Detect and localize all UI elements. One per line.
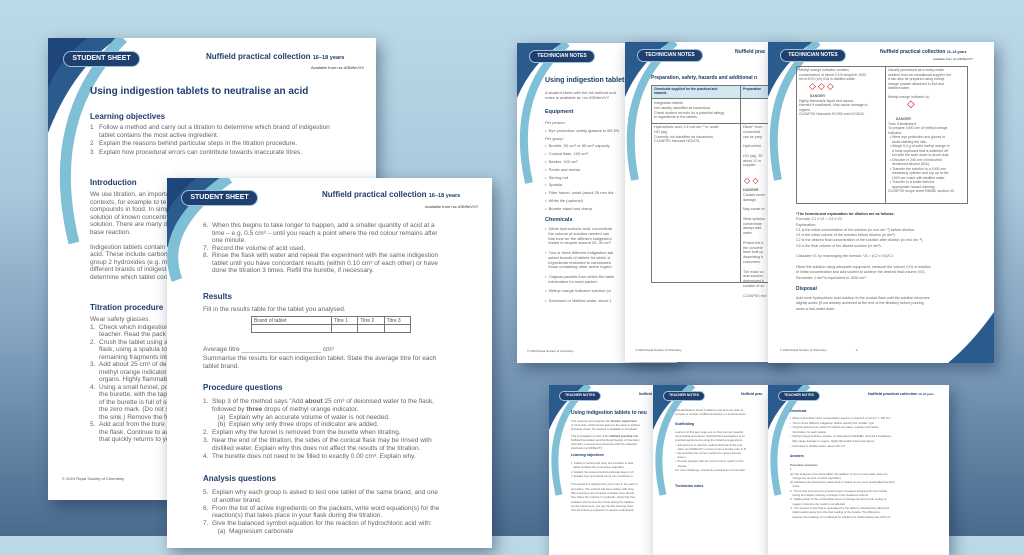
page: student sheet 1: 1 Follow a method and carry out a titration to determine which brand of indigestion <box>90 124 330 131</box>
page: technician notes 1: Per person: <box>545 120 566 125</box>
pill: TECHNICIAN NOTES <box>788 52 838 58</box>
chemicals: Chemicals <box>790 409 806 413</box>
pill <box>778 391 820 401</box>
page: student sheet 2: of another brand. <box>212 497 262 504</box>
hazard table: solution from an educational supplier but <box>888 72 951 76</box>
pill <box>181 190 258 206</box>
page: student sheet 1: the zero mark. (Do not s <box>99 406 169 413</box>
page: student sheet 2: 7. Give the balanced symbol equation for the reaction of hydrochloric acid with: <box>203 520 432 527</box>
page: student sheet 2: (a) Explain why an accurate volume of water is not needed. <box>217 414 390 421</box>
page: technician notes 3: © 2024 Royal Society of Chemistry 3 <box>780 348 857 352</box>
heading: technician notes: Technician notes <box>675 484 703 488</box>
hazard table: it can also be prepared using methyl <box>888 77 944 81</box>
page: teacher notes 2: Learners in this age range are on their journey towards <box>675 430 743 434</box>
page: technician notes 3: down a foul-water drain. <box>796 307 835 311</box>
pill: student sheet: STUDENT SHEET <box>72 55 131 62</box>
page: student sheet 1: solution of known concentr <box>90 214 167 220</box>
page: teacher notes 2: lesson. <box>677 455 686 459</box>
page: technician notes 1 <box>517 43 677 363</box>
table: Chemicals supplied for the practical and <box>654 87 717 91</box>
page: student sheet 1: group 2 hydroxides (e.g. m <box>90 258 167 266</box>
table: to ingredients in the tablets. <box>654 115 698 119</box>
table: May cause re <box>743 207 765 211</box>
page: teacher notes 1: 1 Follow a method and carry out a titration to dete <box>571 461 633 465</box>
hazard table: but with the sash down to avoid dust. <box>892 153 949 157</box>
formula text: Dilute the solution using adequate equipment, measure the volume (V1) of solution <box>796 265 931 269</box>
hazard table: DANGER <box>810 94 825 98</box>
page: student sheet 2: 2. Explain why the funnel is removed from the burette when titrating. <box>203 429 401 436</box>
chemicals: Chemicals <box>545 217 573 223</box>
formula text: of initial concentration and add solvent to achieve the desired final volume (V2). <box>796 270 926 274</box>
page: teacher notes 3: result. <box>792 484 800 488</box>
hazard table: measuring cylinder and top up to the <box>892 171 949 175</box>
hazard table <box>796 66 968 204</box>
hazard table: CLEAPSS recipe sheet RB085, section 40. <box>888 189 955 193</box>
page: teacher notes 3: information for each packet <box>792 430 826 434</box>
hazard table: indicator: <box>888 130 902 134</box>
page: technician notes 2: CLEAPSS reci <box>743 294 766 298</box>
page: student sheet 1: of the burette is full of so <box>99 398 170 406</box>
hazard table: denatured alcohol (IDA). <box>892 162 930 166</box>
page: technician notes 1: • Methyl orange indicator solution (or <box>545 288 611 293</box>
page: technician notes 1: those containing other active ingred <box>548 264 612 269</box>
header: Nuffield practical collection 16–18 years <box>322 190 460 199</box>
pill: TEACHER NOTES <box>565 393 595 397</box>
page: technician notes 1: notes is available at: rsc.li/3N9eVXY <box>545 95 609 100</box>
page: student sheet 1: 1. Check which indigestion <box>90 324 169 330</box>
table: Check student records for a potential allergy <box>654 111 724 115</box>
method steps: time – e.g. 0.5 cm³ – until you reach a point where the red colour remains after <box>212 230 437 236</box>
pill <box>780 49 846 62</box>
page: student sheet 1: tablet contains the most active ingredient. <box>99 132 219 138</box>
page: student sheet 2: 4. The burette does not need to be filled to exactly 0.00 cm³. Explain why. <box>203 453 416 460</box>
hazard table: Toxic if swallowed. <box>888 122 917 126</box>
table: Preparation <box>743 87 761 91</box>
pill: student sheet <box>63 51 140 67</box>
page: teacher notes 3: 3. Adding water to the conical flask does not change the amount (in moles) of <box>790 497 886 501</box>
page: teacher notes 2: • Ask learners to read the method and look at the prac <box>675 443 743 447</box>
method steps <box>203 222 438 274</box>
page: technician notes 2: © 2024 Royal Society of Chemistry <box>635 348 682 352</box>
table: have built up <box>743 250 763 254</box>
formula text: *The formula and explanation for dilution are as follows: <box>796 212 895 216</box>
page: student sheet 1: 2. Crush the tablet using a <box>90 338 168 346</box>
page: teacher notes 3: during the titration causing a change in the measured volume. <box>792 493 869 497</box>
table: Currently not classified as hazardous. <box>654 135 714 139</box>
hazard table: avoid staining the skin. <box>892 140 927 144</box>
page: teacher notes 2: Nuffield prac <box>741 392 762 396</box>
hazard table: Usually purchased as a ready-made <box>888 68 944 72</box>
pill: TEACHER NOTES <box>784 393 814 397</box>
page: student sheet 2: (b) Explain why only three drops of indicator are added. <box>217 421 379 428</box>
table: HCl (aq), 35 <box>743 154 762 158</box>
hazard table: concentration of about 0.4% weight in 1000 <box>799 72 866 76</box>
hazard table: • Weigh 0.4 g of solid methyl orange in <box>890 144 950 148</box>
page: teacher notes 3: (b) Indicators are themselves weak acids or bases so too much would affect the final <box>790 480 894 484</box>
table: The exact co <box>743 270 764 274</box>
page: technician notes 1: • Deionised or distilled water, about 1 <box>545 298 612 303</box>
page: student sheet 2: tablet brand. <box>203 363 239 370</box>
page: technician notes 1: • Dilute hydrochloric acid, concentrati <box>545 226 612 231</box>
page: student sheet 1: the sink.) Remove the fu <box>99 414 169 420</box>
table: water. <box>743 231 753 235</box>
table: concentrate <box>743 222 762 226</box>
page: student sheet 2: Summarise the results for each indigestion tablet. State the average titre for each <box>203 354 436 362</box>
pill: STUDENT SHEET <box>190 194 249 201</box>
page: student sheet 1: determine which tablet con <box>90 274 167 280</box>
pill: TEACHER NOTES <box>669 393 699 397</box>
page: teacher notes 1: When learners test complete a titration they should <box>571 491 634 495</box>
method steps: tablet until you have concordant results (within 0.10 cm³ of each other) or have <box>212 260 438 266</box>
page: technician notes 1: Per group: <box>545 136 564 141</box>
page: student sheet 1: flask, using a spatula to <box>99 346 167 353</box>
page: teacher notes 2: • Provide samples with the correct colour match for the <box>675 459 743 463</box>
titration procedure: Titration procedure <box>90 303 163 312</box>
formula text <box>796 212 931 280</box>
page: student sheet 1: Wear safety glasses. <box>90 316 150 323</box>
hazard table: Highly flammable liquid and vapour. <box>799 98 854 102</box>
page: student sheet 2: Average titre ______________________ cm³ <box>203 346 334 353</box>
page: teacher notes 1: tablet contains the most active ingredient. <box>573 465 625 469</box>
scaffolding: Scaffolding <box>675 422 694 426</box>
method steps: done the titration 3 times. Refill the burette, if necessary. <box>212 267 374 274</box>
page: technician notes 1: • Pestle and mortar <box>545 167 580 172</box>
heading: Preparation, safety, hazards and additional n <box>651 75 757 81</box>
hazard table: Methyl orange indicator (s) <box>888 95 929 99</box>
page: student sheet 1: 2 Explain the reasons behind particular steps in the titration procedure. <box>90 140 297 147</box>
pill: TECHNICIAN NOTES <box>645 52 695 58</box>
page: teacher notes 1: procedure. The method has been written with simp <box>571 487 634 491</box>
page: teacher notes 1: out the experiment, you say the first learning objec <box>571 504 634 508</box>
formula text: Calculate V1 by rearranging the formula: V1 = (C2 x V2)/C1 <box>796 254 893 258</box>
page: technician notes 1: • Conical flask, 100 cm³ <box>545 151 588 156</box>
page: student sheet 1: organs. Highly flammab <box>99 376 167 383</box>
formula text: C1 is the initial concentration of the solution (in mol dm⁻³) before dilution. <box>796 228 915 232</box>
page: teacher notes 1: practicals rsc.li/3N9eVXY <box>571 446 602 450</box>
introduction: Introduction <box>90 178 137 187</box>
page: teacher notes 1: chemistry concepts and processes with this collection <box>571 442 637 446</box>
page: technician notes 2 <box>625 42 785 362</box>
page: teacher notes 2: out practical procedures. Scaffold this investigation to su <box>675 434 745 438</box>
page: technician notes 2: solution of so <box>743 284 764 288</box>
table: ◇ ◇ <box>744 176 759 185</box>
table: HCl (aq) <box>654 130 667 134</box>
table: damage. <box>743 198 757 202</box>
page: technician notes 1: • Two or three different indigestion tab <box>545 250 613 255</box>
table: Hydrochlori <box>743 144 761 148</box>
formula text: C2 is the desired final concentration of the solution after dilution (in mol dm⁻³). <box>796 238 923 242</box>
results table: Titre 2 <box>360 318 374 324</box>
page: student sheet 1 <box>48 38 376 500</box>
page: student sheet 1: compounds in food. In simp <box>90 206 170 213</box>
table: supplier. <box>743 163 756 167</box>
page: teacher notes 2: video rsc.li/3N9eVXY on how to use a burette prior to th <box>677 447 746 451</box>
page: teacher notes 1: Use the follow-up questions to assess understandi <box>571 508 633 512</box>
formula text: Reminder: 1 dm³ is equivalent to 1000 cm³. <box>796 276 867 280</box>
page: teacher notes 2 <box>653 385 803 555</box>
pill <box>637 49 703 62</box>
table: CLEAPSS Hazcard HC047A <box>654 139 700 143</box>
header: Nuffield practical collection 16–18 years <box>880 49 967 55</box>
page: teacher notes 1: indicator and remove the funnel during the addition <box>571 500 634 504</box>
table <box>651 85 791 283</box>
page: teacher notes 3 <box>768 385 949 555</box>
hazard table: ml of 20% (v/v) IDA in distilled water. <box>799 77 856 81</box>
hazard table: CLEAPSS Hazcards HC050 and HC040A. <box>799 112 865 116</box>
page: teacher notes 1: they follow the method. In particular, check that they <box>571 495 635 499</box>
hazard table: • Dissolve in 200 cm³ of industrial <box>890 158 942 162</box>
page: teacher notes 3: • Dilute hydrochloric acid, concentration equal to or below 0.4 mol dm⁻³, 100 cm³ <box>790 416 891 420</box>
table: Dilute* from <box>743 125 762 129</box>
page: student sheet 2: 5. Explain why each group is asked to test one tablet of the same brand, and one <box>203 489 438 496</box>
page: student sheet 1: remaining fragments int <box>99 354 167 360</box>
table: Hydrochloric acid, 0.4 mol dm⁻³ or under <box>654 125 719 129</box>
hazard table: • Transfer the solution to a 1000 cm³ <box>890 166 946 170</box>
table: Causes sever <box>743 193 765 197</box>
results: Results <box>203 292 232 301</box>
page: teacher notes 1: 3 Explain how procedural errors can contribute to <box>571 474 633 478</box>
page: student sheet 1: Indigestion tablets contain <box>90 244 165 250</box>
page: technician notes 3: Available from rsc.li/3N9eVXY <box>933 57 973 61</box>
page: technician notes 1: © 2024 Royal Society of Chemistry <box>527 349 574 353</box>
pill <box>663 391 705 401</box>
page: technician notes 1: • Stirring rod <box>545 175 568 180</box>
page: student sheet 1: methyl orange indicator <box>99 368 167 376</box>
table: determined b <box>743 279 764 283</box>
page: teacher notes 2: change. <box>677 464 687 468</box>
page: technician notes 2: Nuffield prac <box>735 49 766 55</box>
results table: Titre 1 <box>334 318 348 324</box>
method steps: 6. When this begins to take longer to happen, add a smaller quantity of acid at a <box>203 222 435 229</box>
table: Indigestion tablets <box>654 101 683 105</box>
page: student sheet 1: the flask. Continue to ad <box>99 428 169 436</box>
hazard table: orange powder dissolved in IDA and <box>888 82 944 86</box>
page: teacher notes 1: This investigation is part of the Nuffield practical coll <box>571 434 638 438</box>
method steps: 7. Record the volume of acid used. <box>203 244 305 252</box>
disposal: Disposal <box>796 286 817 292</box>
page: technician notes 3: slightly acidic (if not already achieved at the end of the titration) before pouring <box>796 301 924 305</box>
page: technician notes 1: ingredients restricted to carbonates <box>548 260 611 265</box>
method steps: 8. Rinse the flask with water and repeat the experiment with the same indigestion <box>203 252 438 259</box>
page: technician notes 1: tested to require around 20–30 cm³ <box>548 240 611 245</box>
table: DANGER <box>743 188 759 192</box>
table: the concentr <box>743 246 763 250</box>
page: teacher notes 1: Nuffield <box>639 392 652 396</box>
page: teacher notes 2: compare a number of different brands in a practical lesso <box>675 412 746 416</box>
table: Protect the b <box>743 241 763 245</box>
page: student sheet 1: that quickly returns to ye <box>99 436 169 443</box>
hazard table: a fume cupboard that is switched off <box>892 148 948 152</box>
page: teacher notes 2: 'standardisation' brand of tablet to test and one other br <box>675 408 743 412</box>
table: hazards <box>654 91 666 95</box>
page: teacher notes 3: Procedure questions <box>790 463 818 467</box>
page: technician notes 1: • Spatula <box>545 182 562 187</box>
table: Wear splasho <box>743 217 765 221</box>
page: teacher notes 2: For more challenge, extend the practical as a bond chall <box>675 468 744 472</box>
hazard table: DANGER <box>896 117 911 121</box>
page: teacher notes 3: 4. The amount of acid that is neutralised by the tablet is calculated by taking the <box>790 506 889 510</box>
page: student sheet 1: 3 Explain how procedural errors can contribute towards inaccurate titres. <box>90 149 302 156</box>
page: student sheet 2: reaction(s) that takes place in your flask during the titration. <box>212 512 382 519</box>
page: student sheet 1: contexts, for example to te <box>90 198 166 206</box>
pill <box>529 50 595 63</box>
page: technician notes 1: trial runs for the different indigestion <box>548 236 612 241</box>
page: teacher notes 1: Learning objectives <box>571 453 604 457</box>
page: student sheet 2: followed by three drops of methyl orange indicator. <box>212 406 358 413</box>
page: technician notes 1: • Burette, 50 cm³ or 50 cm³ capacity <box>545 143 610 148</box>
page: student sheet 1: teacher. Read the pack <box>99 331 166 338</box>
page: teacher notes 3: reagent, therefore the result is not affected. <box>792 502 846 506</box>
table: always add <box>743 226 761 230</box>
page: student sheet 1: Available from rsc.li/3N9eVXY <box>311 65 364 70</box>
page: technician notes 1: • White tile (optional) <box>545 198 583 203</box>
hazard table: ◇◇◇ <box>809 81 836 91</box>
page: teacher notes 2: • Demonstrate the correct method for using a burette <box>675 451 741 455</box>
page: teacher notes 3: initial reading away from the final reading of the burette. The difference <box>792 510 880 514</box>
title: Using indigestion tablets <box>545 77 628 84</box>
page: technician notes 1: • Beaker, 100 cm³ <box>545 159 578 164</box>
formula text: V1 is the initial volume of the solution before dilution (in dm³). <box>796 233 896 237</box>
formula text: Formula: C1 x V1 = C2 x V2 <box>796 217 842 221</box>
table: customers. <box>743 260 761 264</box>
hazard table: distilled water. <box>888 86 910 90</box>
page: teacher notes 3: 2. The funnel is removed to prevent drops of reagent dropping into the burette <box>790 489 887 493</box>
page: technician notes 1: • Burette stand and clamp <box>545 206 592 211</box>
hazard table: Methyl orange indicator solution, <box>799 68 849 72</box>
hazard table: ◇ <box>907 99 915 110</box>
page: student sheet 2: distilled water. Explain why this does not affect the results of the titration. <box>212 445 420 452</box>
hazard table: To prepare 1000 cm³ of methyl orange <box>888 126 947 130</box>
page: student sheet 2: Fill in the results table for the tablet you analysed. <box>203 306 346 313</box>
page: student sheet 2: (a) Magnesium carbonate <box>217 528 293 535</box>
analysis questions: Analysis questions <box>203 474 276 483</box>
table: can be prep <box>743 135 762 139</box>
hazard table: • Wear eye protection and gloves to <box>890 135 945 139</box>
page: student sheet 2: Available from rsc.li/3N9eVXY <box>425 204 478 209</box>
page: teacher notes 1: The resource is designed for you to use in the early st <box>571 482 638 486</box>
page: student sheet 2: 1. Step 3 of the method says "Add about 25 cm³ of deionised water to the flask, <box>203 398 434 405</box>
title: Using indigestion tablets to neutralise an acid <box>90 86 308 97</box>
page: teacher notes 3: • Original packets from which the tablets are taken, together with active <box>790 425 879 429</box>
hazard table: Harmful if swallowed, May cause damage to <box>799 103 867 107</box>
page: student sheet 2: 3. Near the end of the titration, the sides of the conical flask may be rinsed with <box>203 437 432 444</box>
page: teacher notes 1: 2 Explain the reasons behind particular steps in th <box>571 470 634 474</box>
results table: Brand of tablet <box>254 318 287 324</box>
page: technician notes 1: • Eye protection: safety glasses to BS EN <box>545 128 619 133</box>
procedure questions: Procedure questions <box>203 383 283 392</box>
page: student sheet 1: different brands of indigest <box>90 266 166 273</box>
table: acid solution <box>743 274 763 278</box>
hazard table: • Transfer to a bottle with the <box>890 180 934 184</box>
page: technician notes 1: the volume of solution needed can <box>548 231 609 236</box>
page: technician notes 1: • Filter funnel, small (about 35 mm dia <box>545 190 613 195</box>
header: Nuffield practical collection 16–18 years <box>206 52 344 61</box>
results table: Titre 3 <box>387 318 401 324</box>
pill: TECHNICIAN NOTES <box>537 53 587 59</box>
method steps: one minute. <box>212 237 246 244</box>
page: student sheet 1: 3. Add about 25 cm³ of de <box>90 361 167 368</box>
answers: Answers <box>790 454 804 458</box>
table: about 12 m <box>743 159 761 163</box>
hazard table: 1000 cm³ mark with distilled water. <box>892 176 945 180</box>
page: teacher notes 3: • Methyl orange indicator solution (or alternative) DANGER. Harmful if swallowed. <box>790 434 892 438</box>
page: teacher notes 3: (a) The analysis is the whole tablet; the addition of more or less water does not <box>790 472 887 476</box>
page: student sheet 1: solution. There are many di <box>90 221 169 228</box>
page: student sheet 1: We use titration, an importa <box>90 191 169 198</box>
page: teacher notes 1: or Chemistry, which shows learners the steps in titration <box>571 423 640 427</box>
page: technician notes 1: select brands of tablets for which a <box>548 255 610 260</box>
page: student sheet 1: base reaction. <box>90 228 131 236</box>
page: teacher notes 3: • Deionised or distilled water, about 100 cm³ <box>790 444 845 448</box>
page: teacher notes 3: 1. <box>790 467 792 471</box>
formula text: V2 is the final volume of the diluted solution (in dm³). <box>796 244 882 248</box>
page: technician notes 1: information for each packet. <box>548 279 598 284</box>
page: teacher notes 3: May cause damage to organs. Highly flammable liquid and vapour. <box>792 439 875 443</box>
page: student sheet 1: 4. Using a small funnel, pou <box>90 384 172 390</box>
pill <box>559 391 601 401</box>
table: Not usually classified as hazardous. <box>654 106 711 110</box>
formula text: Explanation: <box>796 223 816 227</box>
title: Using indigestion tablets to neu <box>571 410 647 416</box>
learning objectives: Learning objectives <box>90 112 165 121</box>
page: teacher notes 3: between the readings is not affected by whether the initial reading was 0.00 cm³ <box>792 515 891 519</box>
page: teacher notes 1: including visual. The student is available to download <box>571 427 637 431</box>
page: technician notes 1: • Original packets from which the table <box>545 274 614 279</box>
page: teacher notes 2: practical requirements using the following suggestions: <box>675 438 743 442</box>
page: teacher notes 1 <box>549 385 699 555</box>
page: student sheet 2 <box>167 178 492 548</box>
page: student sheet 2: 6. From the list of active ingredients on the packets, write word equation(s) for the <box>203 505 439 512</box>
hazard table: organs. <box>799 108 811 112</box>
page: student sheet 1: the burette, with the tap <box>99 391 167 398</box>
header: Nuffield practical collection 16–18 years <box>868 392 934 396</box>
page: technician notes 3: Add more hydrochloric acid solution to the conical flask until the solution becomes <box>796 296 929 300</box>
page: teacher notes 3: change the amount of active ingredient. <box>792 476 841 480</box>
results table <box>251 316 411 333</box>
page: teacher notes 1: This resource accompanies the titration experiment <box>571 419 637 423</box>
page: teacher notes 3: • Two or three different indigestion tablets classify this 'smaller' type <box>790 421 874 425</box>
page: technician notes 3 <box>768 42 994 363</box>
table: dispensing b <box>743 255 763 259</box>
hazard table: appropriate hazard warning. <box>892 184 935 188</box>
footer: © 2024 Royal Society of Chemistry <box>62 476 124 481</box>
equipment: Equipment <box>545 109 573 115</box>
page: student sheet 1: acid. These include carbon <box>90 251 168 258</box>
page: student sheet 1: 5. Add acid from the bure <box>90 421 165 428</box>
page: technician notes 1: A student sheet with the full method and <box>545 90 616 95</box>
table: concentrat <box>743 130 760 134</box>
page: teacher notes 1: Nuffield Foundation and the Royal Society of Chemistry <box>571 438 640 442</box>
